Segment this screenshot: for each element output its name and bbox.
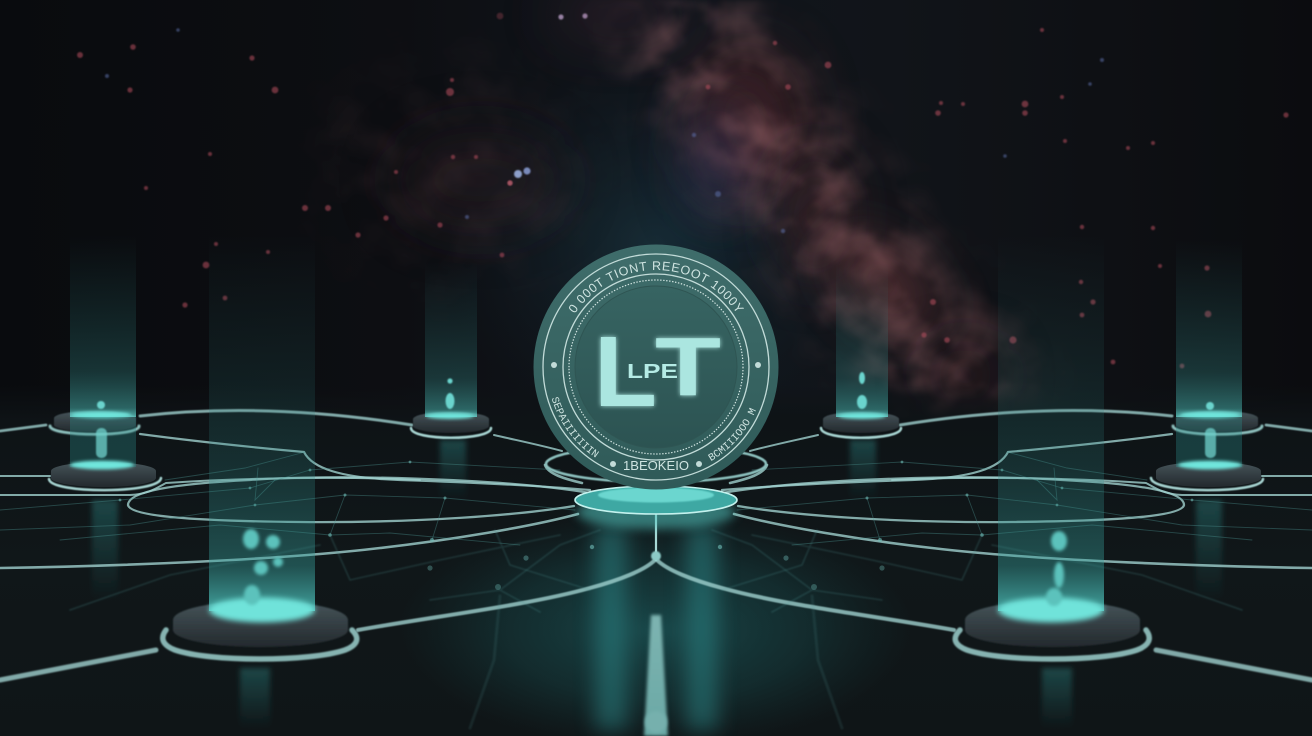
coin letter L: L [594,316,657,428]
coin rim text right: BCMIIIOOO M [708,408,756,461]
background: deep space nebula [76,0,1290,412]
node: lower far left [49,417,161,490]
central glowing pedestal [575,486,737,529]
node: top far left [50,235,139,434]
coin rim dots [551,362,761,467]
coin letters LPE: LPE [627,361,678,383]
pedestal ring behind coin [546,446,766,482]
bright blue star cluster [508,13,588,185]
node: mid left [411,262,491,438]
coin rim text bottom: 1BEOKEIO [623,459,689,473]
network lines left [0,411,655,728]
pillar reflections on floor [92,440,1222,728]
node: mid right [821,262,901,438]
coin letter T: T [655,320,721,413]
stars [77,13,1289,368]
coin [534,244,778,490]
coin rim text left: SEPAIIIIIIIN [552,397,599,458]
floor: network plane [0,385,1312,736]
coin rim text top: 0 000T TIONT REEOOT 1000Y [569,261,744,312]
network lines right [657,411,1312,728]
node: top far right [1173,240,1262,434]
node: lower far right [1151,417,1263,490]
node: large left [163,235,357,659]
centre trunk line [644,503,668,736]
coin body [534,244,778,490]
node: large right [955,235,1149,659]
coin inner face [575,286,737,448]
